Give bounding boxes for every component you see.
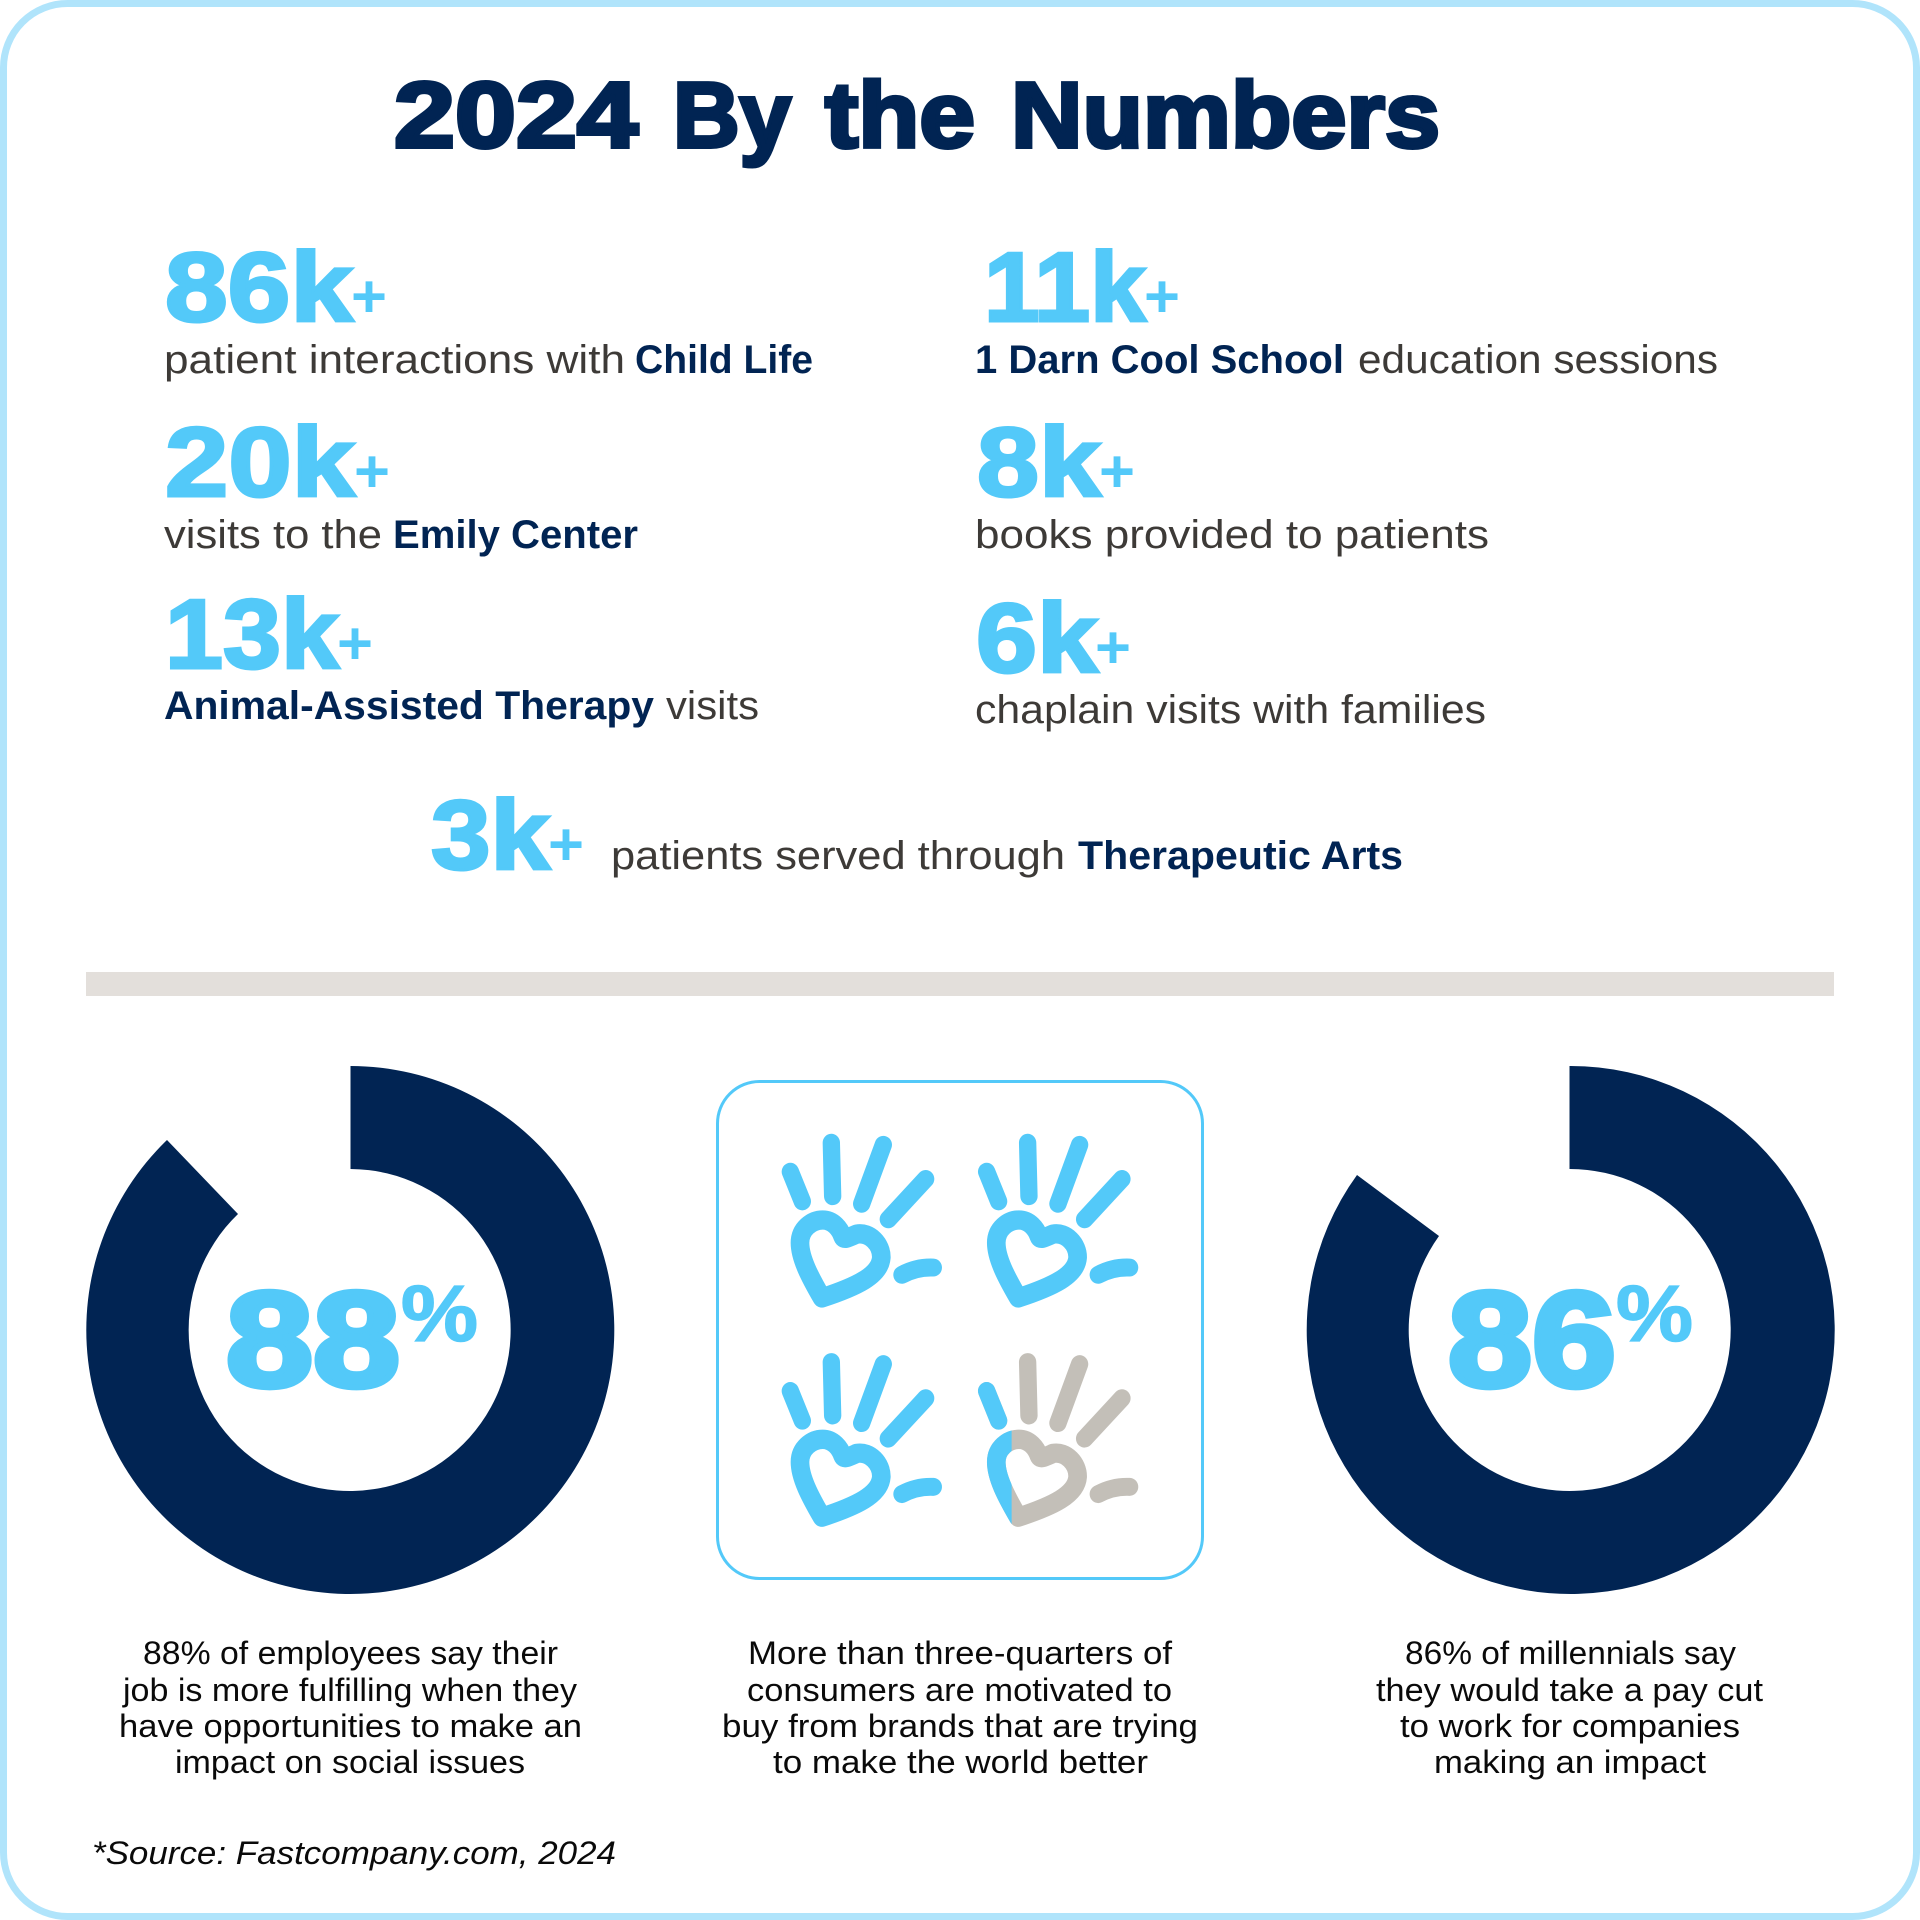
stat: 20k+ Emily Center — [164, 407, 638, 557]
stat: 13k+ Animal-Assisted Therapy: Animal-Assisted Therapy — [164, 684, 655, 728]
donut chart: 86% — [1307, 1066, 1835, 1594]
stat: 8k+ books: 8k — [977, 407, 1102, 517]
stat: 6k+ chaplain visits — [975, 583, 1486, 732]
caption: three-quarters of consumers — [722, 1635, 1198, 1780]
title: Numbers — [1011, 63, 1440, 167]
icon: hand 3 — [790, 1362, 933, 1517]
stat: 6k+ chaplain visits: + — [1095, 614, 1131, 681]
panel: hand icons — [718, 1082, 1202, 1578]
stat: 20k+ Emily Center: Emily Center — [393, 513, 638, 557]
caption: three-quarters of consumers: consumers are motivated to — [747, 1672, 1172, 1708]
caption: 86% of millennials: making an impact — [1434, 1744, 1706, 1780]
stat: 13k+ Animal-Assisted Therapy: + — [337, 610, 373, 677]
stat: 6k+ chaplain visits: 6k — [976, 583, 1099, 693]
stat: 3k+ Therapeutic Arts: 3k — [431, 780, 551, 890]
stat: 20k+ Emily Center: visits to the — [164, 513, 382, 557]
caption: 88% of employees: job is more fulfilling when they — [122, 1672, 577, 1708]
stat: 86k+ patient interactions: + — [351, 263, 387, 330]
caption: 86% of millennials: they would take a pay cut — [1376, 1672, 1763, 1708]
stat: 20k+ Emily Center: + — [354, 438, 390, 505]
icon: hand 4 partly filled — [987, 1362, 1130, 1517]
donut chart: 86%: 86 — [1448, 1264, 1616, 1415]
title: 2024 — [394, 63, 638, 167]
donut chart: 88%: 88 — [226, 1264, 400, 1415]
caption: three-quarters of consumers: More than three-quarters of — [748, 1635, 1172, 1671]
stat: 20k+ Emily Center: 20k — [165, 407, 356, 517]
title: the — [825, 63, 975, 167]
stat: 86k+ patient interactions: 86k — [165, 232, 354, 342]
stat: 8k+ books: + — [1099, 438, 1135, 505]
stat: 3k+ Therapeutic Arts: Therapeutic Arts — [1078, 834, 1403, 878]
stat: 11k+ education sessions: 1 Darn Cool School — [975, 338, 1344, 382]
caption: 88% of employees: impact on social issues — [175, 1744, 525, 1780]
stat: 11k+ education sessions: education sessions — [1358, 338, 1718, 382]
icon: hand 1 — [790, 1143, 933, 1298]
title: By — [673, 63, 791, 167]
stat: 6k+ chaplain visits: chaplain visits with families — [975, 688, 1486, 732]
stat: 13k+ Animal-Assisted Therapy: visits — [666, 684, 759, 728]
donut chart: 86%: % — [1616, 1269, 1693, 1358]
caption: 86% of millennials: 86% of millennials say — [1405, 1635, 1736, 1671]
stat: 3k+ Therapeutic Arts: patients served through — [611, 834, 1065, 878]
stat: 11k+ education sessions: + — [1144, 263, 1180, 330]
donut chart: 88%: % — [401, 1269, 478, 1358]
stat: 8k+ books — [975, 407, 1489, 557]
stat: 11k+ education sessions: 11k — [984, 232, 1147, 342]
stat: 13k+ Animal-Assisted Therapy: 13k — [165, 579, 340, 689]
title — [394, 63, 1440, 167]
stat: 11k+ education sessions — [975, 232, 1718, 382]
caption: 86% of millennials: to work for companies — [1400, 1708, 1740, 1744]
stat: 13k+ Animal-Assisted Therapy — [164, 579, 759, 728]
source note: *Source: Fastcompany.com, 2024 — [92, 1835, 616, 1871]
donut chart: 88% — [86, 1066, 614, 1594]
stat: 86k+ patient interactions: patient interactions with — [164, 338, 625, 382]
stat: 86k+ patient interactions — [164, 232, 813, 382]
icon: hand 2 — [987, 1143, 1130, 1298]
caption: 88% of employees: 88% of employees say their — [143, 1635, 558, 1671]
caption: three-quarters of consumers: buy from brands that are trying — [722, 1708, 1198, 1744]
stat: 3k+ Therapeutic Arts: + — [548, 811, 584, 878]
caption: 88% of employees — [119, 1635, 582, 1780]
caption: three-quarters of consumers: to make the world better — [773, 1744, 1148, 1780]
stat: 8k+ books: books provided to patients — [975, 513, 1489, 557]
caption: 88% of employees: have opportunities to make an — [119, 1708, 582, 1744]
stat: 86k+ patient interactions: Child Life — [635, 338, 813, 382]
stat: 3k+ Therapeutic Arts — [431, 780, 1403, 890]
caption: 86% of millennials — [1376, 1635, 1763, 1780]
